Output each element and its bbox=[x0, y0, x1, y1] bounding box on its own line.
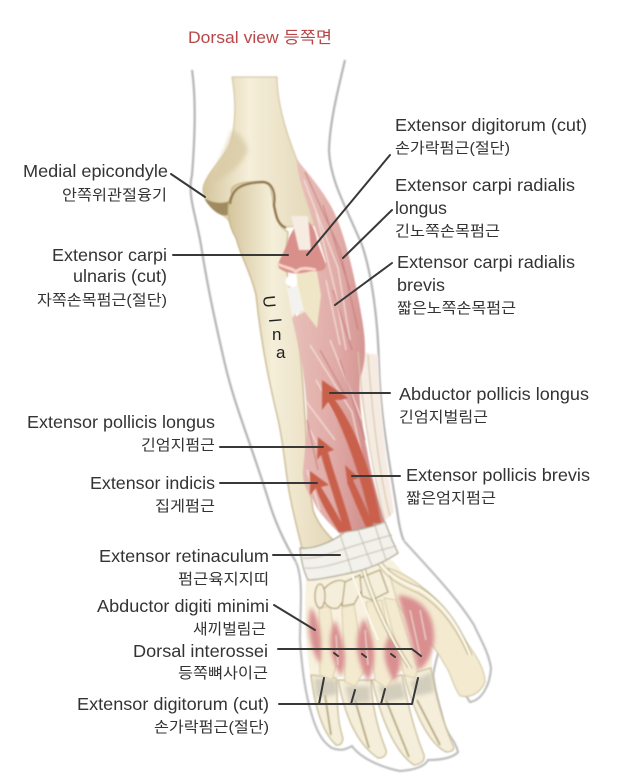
dorsal interossei and abductor digiti minimi muscles bbox=[309, 595, 434, 682]
ulna label: l bbox=[265, 318, 284, 323]
label: abductor digiti minimi: Abductor digiti minimi bbox=[97, 596, 269, 616]
ulna label bbox=[259, 295, 286, 362]
title: Dorsal view 등쪽면 bbox=[188, 28, 332, 47]
tendon strip beside the muscles bbox=[352, 350, 394, 522]
metacarpal bones bbox=[319, 598, 418, 688]
extensor carpi ulnaris cut stump bbox=[278, 221, 326, 273]
label: extensor digitorum cut, hand: 손가락펌근(절단) bbox=[154, 719, 269, 736]
label: extensor pollicis brevis bbox=[406, 465, 590, 507]
label: extensor digitorum cut, forearm: Extensor digitorum (cut) bbox=[395, 115, 587, 135]
long tendons on the hand bbox=[345, 545, 470, 668]
skin outline: hand bbox=[296, 541, 491, 771]
label: extensor retinaculum bbox=[99, 546, 269, 588]
olecranon outline bbox=[230, 182, 286, 228]
muscle fibre streaks bbox=[304, 180, 372, 510]
label: abductor pollicis longus bbox=[399, 384, 589, 426]
label: extensor carpi radialis longus: 긴노쪽손목펌근 bbox=[395, 223, 500, 240]
humerus bbox=[203, 77, 318, 230]
label: abductor digiti minimi bbox=[97, 596, 269, 638]
ulna bbox=[228, 182, 338, 552]
medial epicondyle shadow bbox=[204, 198, 232, 215]
forearm extensor muscles bbox=[292, 160, 385, 534]
fingers bbox=[311, 668, 454, 765]
label: extensor indicis: Extensor indicis bbox=[90, 473, 215, 493]
abductor pollicis longus bbox=[322, 380, 381, 523]
radius bbox=[296, 262, 325, 340]
deep muscle tendons (arrows) bbox=[310, 380, 381, 532]
illustration: forearm and hand bbox=[191, 60, 491, 771]
label: extensor indicis bbox=[90, 473, 215, 515]
interosseous membrane bbox=[286, 276, 304, 316]
extensor pollicis brevis bbox=[345, 465, 374, 527]
label: extensor retinaculum: 펌근육지지띠 bbox=[178, 571, 269, 588]
ulna label: a bbox=[276, 343, 286, 362]
label: extensor pollicis longus bbox=[27, 412, 215, 454]
label: extensor digitorum cut, forearm: 손가락펌근(절단) bbox=[395, 140, 510, 157]
humerus shading bbox=[208, 130, 248, 186]
label: extensor pollicis longus: 긴엄지펌근 bbox=[141, 437, 215, 454]
label: medial epicondyle bbox=[23, 161, 168, 204]
label: abductor digiti minimi: 새끼벌림근 bbox=[193, 621, 266, 638]
label: extensor indicis: 집게펌근 bbox=[155, 498, 215, 515]
label: extensor carpi radialis longus: Extensor carpi radialis bbox=[395, 175, 575, 195]
label: extensor carpi radialis longus bbox=[395, 175, 575, 240]
label: extensor digitorum cut, hand: Extensor digitorum (cut) bbox=[77, 694, 269, 714]
skin outline: arm bbox=[191, 60, 404, 562]
extensor retinaculum bbox=[300, 522, 398, 580]
label: abductor pollicis longus: 긴엄지벌림근 bbox=[399, 409, 488, 426]
ulna label: n bbox=[272, 325, 281, 344]
label: extensor carpi radialis brevis: 짧은노쪽손목펌근 bbox=[397, 300, 516, 317]
carpal bones bbox=[315, 570, 388, 608]
extensor pollicis longus bbox=[317, 437, 352, 531]
label: extensor pollicis brevis: Extensor pollicis brevis bbox=[406, 465, 590, 485]
leader lines bbox=[171, 155, 421, 704]
label: extensor retinaculum: Extensor retinaculum bbox=[99, 546, 269, 566]
label: extensor carpi radialis brevis: Extensor carpi radialis bbox=[397, 252, 575, 272]
label: extensor pollicis longus: Extensor pollicis longus bbox=[27, 412, 215, 432]
label: abductor pollicis longus: Abductor pollicis longus bbox=[399, 384, 589, 404]
label: medial epicondyle: 안쪽위관절융기 bbox=[62, 187, 167, 204]
label: dorsal interossei bbox=[133, 641, 268, 682]
thumb bbox=[388, 568, 485, 696]
label: extensor digitorum cut, forearm bbox=[395, 115, 587, 157]
label: medial epicondyle: Medial epicondyle bbox=[23, 161, 168, 181]
label: dorsal interossei: Dorsal interossei bbox=[133, 641, 268, 661]
ulna label: U bbox=[259, 295, 279, 309]
label: dorsal interossei: 등쪽뼈사이근 bbox=[178, 665, 268, 682]
label: extensor carpi ulnaris: ulnaris (cut) bbox=[73, 266, 167, 286]
extensor indicis bbox=[310, 471, 347, 532]
label: extensor carpi ulnaris: 자쪽손목펌근(절단) bbox=[37, 292, 167, 309]
tendons to the right of the radius bbox=[358, 352, 390, 518]
extensor hood gray webs bbox=[314, 672, 434, 704]
label: extensor carpi radialis brevis bbox=[397, 252, 575, 317]
label: extensor carpi ulnaris: Extensor carpi bbox=[52, 245, 167, 265]
label: extensor pollicis brevis: 짧은엄지펌근 bbox=[406, 490, 496, 507]
label: extensor carpi radialis longus: longus bbox=[395, 198, 447, 218]
label: extensor carpi radialis brevis: brevis bbox=[397, 275, 445, 295]
label: extensor digitorum cut, hand bbox=[77, 694, 269, 736]
label: extensor carpi ulnaris bbox=[37, 245, 167, 309]
hand base bbox=[305, 560, 432, 680]
